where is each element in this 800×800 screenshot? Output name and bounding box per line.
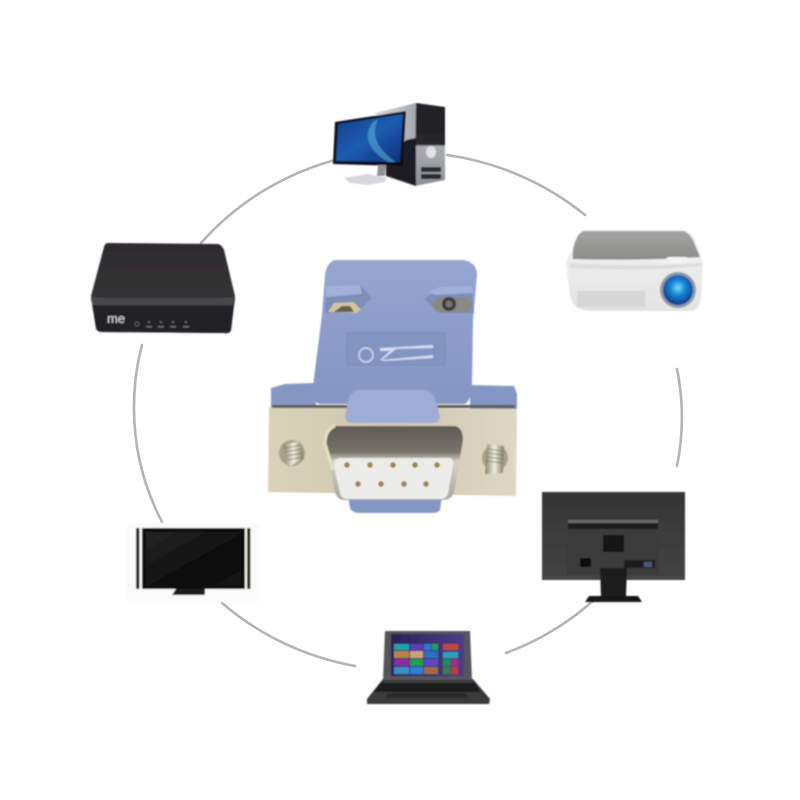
central serial connector [268, 260, 517, 513]
laptop lid [383, 631, 472, 680]
pins [345, 463, 439, 486]
bottom hood lip [348, 495, 442, 513]
icon: monitor rear view [542, 492, 685, 602]
router brand text: me [107, 311, 125, 326]
metal plate [268, 407, 517, 496]
left wing [271, 383, 316, 409]
vent grille [577, 291, 645, 307]
TV side strips [136, 528, 140, 589]
white pin insert [334, 458, 453, 499]
start-screen tiles [394, 644, 458, 674]
rear vent [568, 520, 658, 523]
D-shell [325, 426, 463, 500]
monitor [333, 111, 406, 166]
projector top panel [573, 231, 700, 260]
TV base [172, 589, 205, 595]
router front face [91, 298, 235, 333]
hood latch tab [345, 390, 440, 423]
icon: flat-screen television [127, 523, 260, 602]
connector hood [312, 260, 477, 404]
monitor stand [600, 568, 627, 596]
hood right screw recess [424, 286, 474, 313]
rear ports [580, 558, 591, 567]
logo recess [347, 333, 445, 365]
icon: laptop [367, 631, 490, 704]
hood left screw recess [325, 285, 372, 313]
computer tower [415, 103, 445, 186]
icon: router box [91, 243, 235, 333]
icon: projector [566, 229, 703, 311]
TV screen [142, 528, 245, 589]
mount plate [603, 535, 624, 552]
laptop base [367, 679, 490, 704]
router status lights [135, 321, 189, 327]
right wing [470, 385, 517, 409]
right thumbscrew [482, 444, 508, 474]
left thumbscrew [279, 440, 305, 467]
lens [660, 272, 696, 308]
connection ring [134, 155, 682, 666]
monitor stand [377, 165, 386, 176]
icon: desktop computer [333, 103, 445, 186]
